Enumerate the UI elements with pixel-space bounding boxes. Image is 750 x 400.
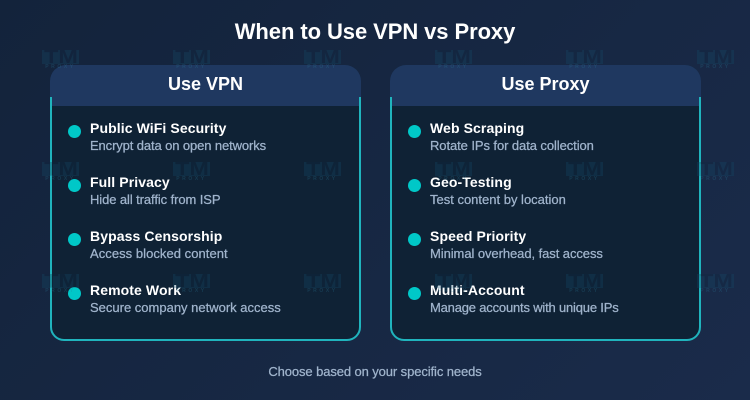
watermark pattern: PROXY [307, 64, 338, 70]
watermark pattern: PROXY [176, 176, 207, 182]
item: full privacy: Hide all traffic from ISP [90, 192, 220, 207]
footer note: Choose based on your specific needs [268, 364, 482, 379]
watermark pattern: PROXY [438, 64, 469, 70]
panel border [50, 97, 361, 341]
watermark pattern: PROXY [438, 288, 469, 294]
panel: use VPN [50, 65, 361, 341]
item: multi-account [408, 282, 619, 315]
item: multi-account: Manage accounts with unique IPs [430, 300, 619, 315]
panel border [390, 97, 701, 341]
watermark pattern: PROXY [569, 176, 600, 182]
panel: use proxy [390, 65, 701, 341]
watermark pattern: PROXY [45, 288, 76, 294]
item: remote work [68, 282, 281, 315]
item: full privacy [68, 174, 220, 207]
watermark pattern: PROXY [307, 176, 338, 182]
watermark pattern: PROXY [176, 64, 207, 70]
item: bypass censorship: Bypass Censorship [90, 228, 222, 244]
watermark pattern: PROXY [700, 176, 731, 182]
watermark pattern: PROXY [569, 64, 600, 70]
watermark pattern: PROXY [700, 64, 731, 70]
watermark pattern: PROXY [438, 176, 469, 182]
watermark pattern: PROXY [569, 288, 600, 294]
watermark pattern: PROXY [45, 176, 76, 182]
item: web scraping: Web Scraping [430, 120, 524, 136]
item: web scraping [408, 120, 594, 153]
item: geo-testing [408, 174, 566, 207]
item: speed priority: Minimal overhead, fast access [430, 246, 603, 261]
watermark pattern: PROXY [307, 288, 338, 294]
item: multi-account: Multi-Account [430, 282, 525, 298]
item: public wifi security: Encrypt data on open networks [90, 138, 266, 153]
watermark pattern: PROXY [700, 288, 731, 294]
item: remote work: Secure company network access [90, 300, 281, 315]
item: public wifi security [68, 120, 266, 153]
item: public wifi security: Public WiFi Security [90, 120, 226, 136]
watermark pattern: PROXY [176, 288, 207, 294]
item: geo-testing: Test content by location [430, 192, 566, 207]
item: remote work: Remote Work [90, 282, 181, 298]
item: web scraping: Rotate IPs for data collection [430, 138, 594, 153]
item: geo-testing: Geo-Testing [430, 174, 512, 190]
item: bypass censorship [68, 228, 228, 261]
panel heading: use VPN [50, 65, 361, 106]
item: bypass censorship: Access blocked content [90, 246, 228, 261]
panel heading: use proxy: Use Proxy [501, 74, 590, 94]
item: speed priority [408, 228, 603, 261]
item: full privacy: Full Privacy [90, 174, 170, 190]
title: When to Use VPN vs Proxy [235, 19, 515, 44]
watermark pattern: PROXY [45, 64, 76, 70]
panel heading: use VPN: Use VPN [168, 74, 243, 94]
panel heading: use proxy [390, 65, 701, 106]
item: speed priority: Speed Priority [430, 228, 526, 244]
